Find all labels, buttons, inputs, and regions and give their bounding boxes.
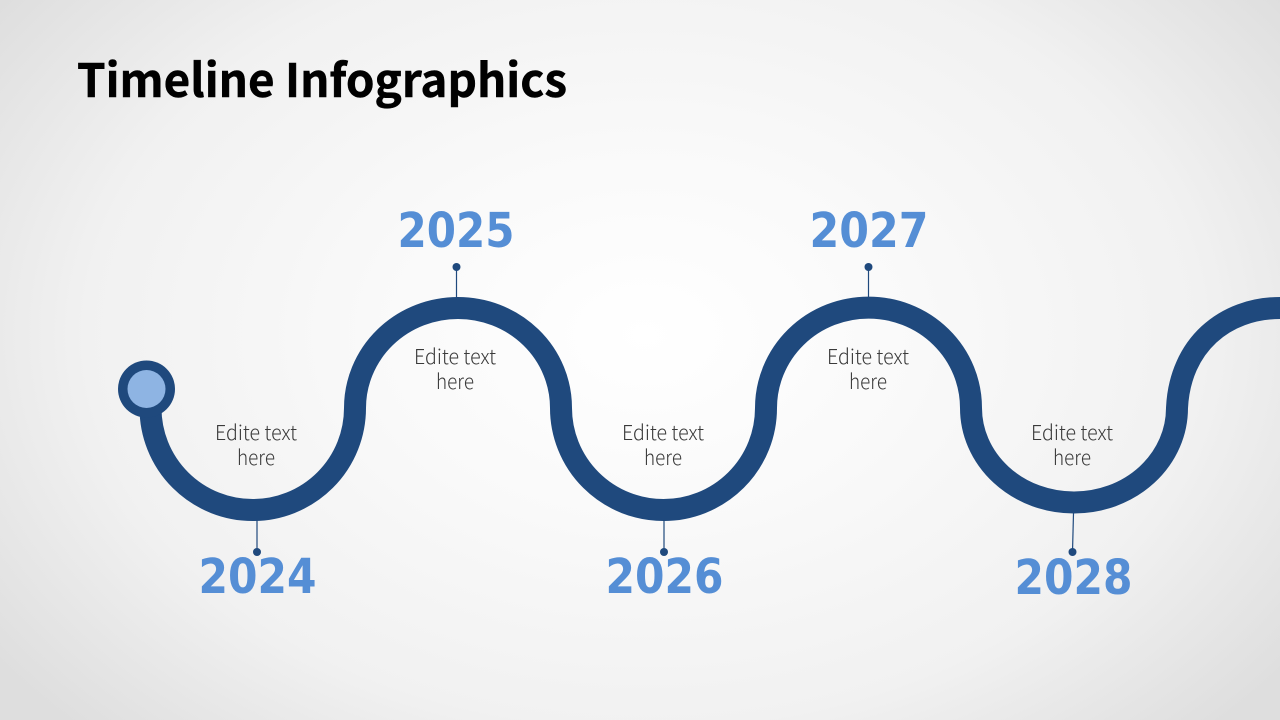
connector 2025 <box>452 263 460 298</box>
text 2027: Edite text <box>827 340 909 370</box>
title: Timeline Infographics <box>77 45 567 111</box>
year 2024: 2024 <box>198 549 316 605</box>
text 2024: Edite text <box>215 416 297 446</box>
text 2028: here <box>1053 441 1091 471</box>
connector 2026 <box>660 520 668 556</box>
year 2027: 2027 <box>810 203 928 259</box>
year 2025: 2025 <box>398 203 514 259</box>
text 2027: here <box>849 365 887 395</box>
text 2026 <box>622 416 704 471</box>
text 2025 <box>414 340 496 395</box>
text 2028: Edite text <box>1031 416 1113 446</box>
text 2026: Edite text <box>622 416 704 446</box>
wavy timeline path <box>150 308 1280 510</box>
text 2027 <box>827 340 909 395</box>
connector 2027 <box>864 263 872 298</box>
text 2024 <box>215 416 297 471</box>
connector 2024 <box>253 520 261 556</box>
text 2026: here <box>644 441 682 471</box>
text 2025: Edite text <box>414 340 496 370</box>
year 2026: 2026 <box>606 549 724 605</box>
text 2025: here <box>436 365 474 395</box>
text 2028 <box>1031 416 1113 471</box>
connector 2028 <box>1068 513 1076 556</box>
start marker <box>118 360 175 418</box>
text 2024: here <box>237 441 275 471</box>
year 2028: 2028 <box>1014 550 1132 606</box>
